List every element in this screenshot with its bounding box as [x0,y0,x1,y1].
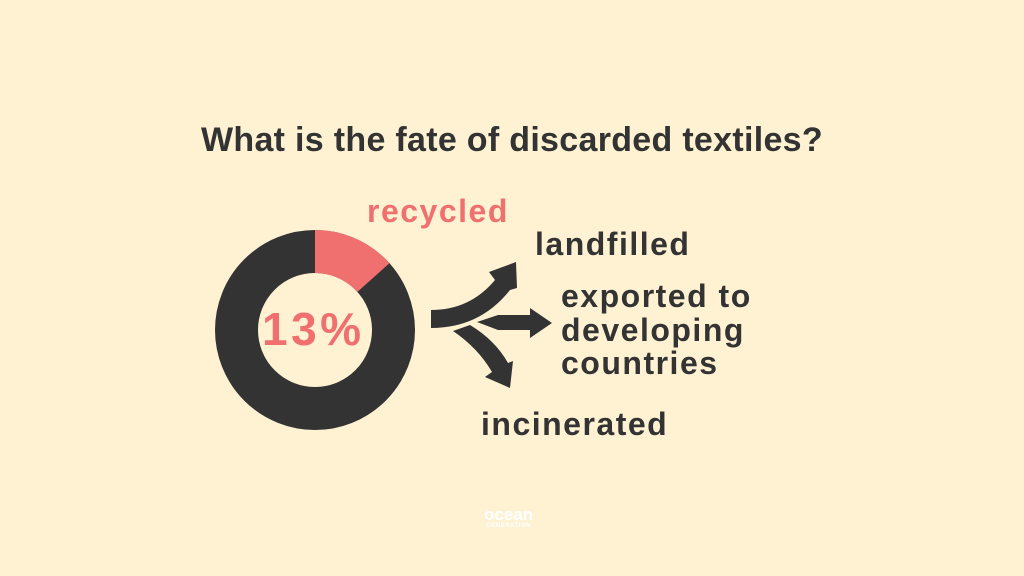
percentage: 13% [262,303,365,355]
logo: GENERATION [486,523,531,529]
arrow: landfilled [431,262,517,328]
arrow: incinerated [453,325,513,388]
label: incinerated: incinerated [481,406,668,442]
logo: ocean [484,505,533,524]
label: exported: exported to [561,278,752,314]
label: exported: developing [561,312,745,348]
title: What is the fate of discarded textiles? [201,121,823,159]
label: exported [561,278,752,381]
label: exported: countries [561,345,719,381]
arrow: exported [477,308,552,338]
label: landfilled: landfilled [535,226,690,262]
label: recycled: recycled [367,193,509,229]
